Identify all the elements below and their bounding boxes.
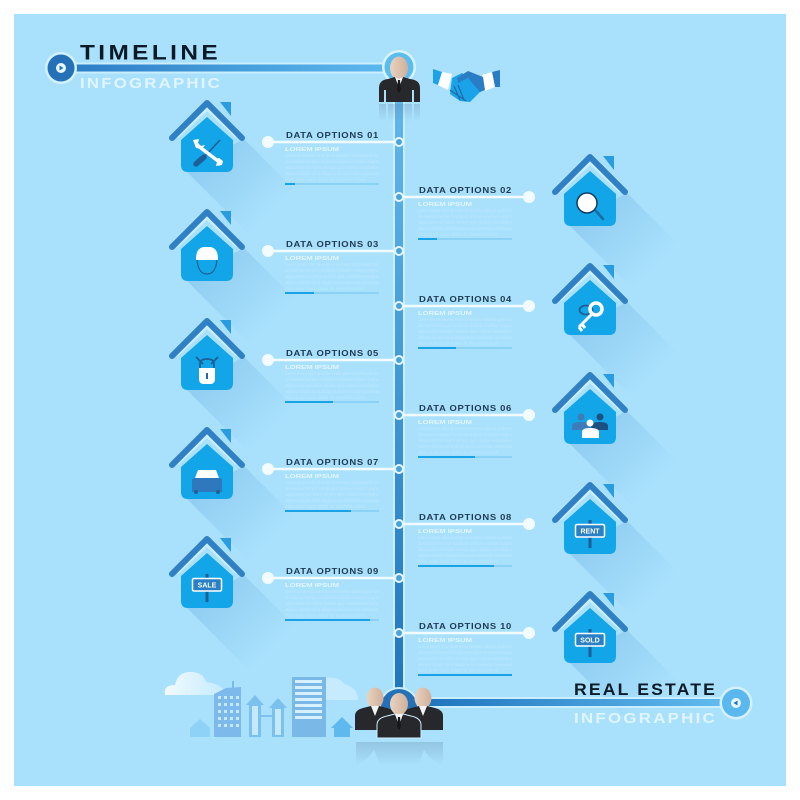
icon: house with tools <box>172 102 314 240</box>
body text 09: aliqua enim ad minim veniam quis nostrud exercitation <box>285 601 379 606</box>
body text 09: ullamco laboris nisi ut aliquip ex ea commodo consequat <box>285 607 380 612</box>
subtitle 04: LOREM IPSUM <box>418 311 472 317</box>
connector 01 <box>262 136 403 148</box>
body text 06: do eiusmod tempor incididunt ut labore et dolore magna <box>418 432 512 437</box>
body text 06: ullamco laboris nisi ut aliquip ex ea commodo consequat <box>418 444 513 449</box>
heading: infographic lower: INFOGRAPHIC <box>574 710 717 727</box>
body text 07: Lorem ipsum dolor sit amet consectetur adipiscing elit sed <box>285 480 379 485</box>
body text 04: duis aute irure dolor in reprehenderit <box>418 341 499 346</box>
icon: handshake <box>433 69 500 102</box>
vertical timeline bar <box>393 90 405 705</box>
row 2: data options 02 <box>395 156 697 294</box>
icon: businessman top <box>379 50 420 122</box>
connector 07 <box>262 463 403 475</box>
body text 03: do eiusmod tempor incididunt ut labore et dolore magna <box>285 268 379 273</box>
body text 02: duis aute irure dolor in reprehenderit <box>418 232 499 237</box>
body text 09 <box>285 589 380 618</box>
bottom end bar <box>425 686 752 720</box>
body text 01: duis aute irure dolor in reprehenderit <box>285 177 366 182</box>
icon: business team <box>355 688 443 766</box>
small house <box>331 717 353 737</box>
body text 07 <box>285 480 380 509</box>
top title bar <box>45 52 390 84</box>
subtitle 03: LOREM IPSUM <box>285 256 339 262</box>
title 07: DATA OPTIONS 07 <box>286 458 379 467</box>
icon: house with key <box>555 265 697 403</box>
body text 05: aliqua enim ad minim veniam quis nostrud exercitation <box>285 383 379 388</box>
body text 05 <box>285 371 380 400</box>
heading: real estate: REAL ESTATE <box>574 681 717 699</box>
body text 02: ullamco laboris nisi ut aliquip ex ea commodo consequat <box>418 226 513 231</box>
title 06: DATA OPTIONS 06 <box>419 404 512 413</box>
body text 06 <box>418 426 513 455</box>
title 01: DATA OPTIONS 01 <box>286 131 379 140</box>
progress 04 <box>418 347 512 349</box>
body text 04: ullamco laboris nisi ut aliquip ex ea commodo consequat <box>418 335 513 340</box>
body text 07: ullamco laboris nisi ut aliquip ex ea commodo consequat <box>285 498 380 503</box>
row 8: data options 08 <box>395 484 697 622</box>
body text 05: ullamco laboris nisi ut aliquip ex ea commodo consequat <box>285 389 380 394</box>
row 4: data options 04 <box>395 265 697 403</box>
icon: house with family <box>555 374 697 512</box>
subtitle 01: LOREM IPSUM <box>285 147 339 153</box>
connector 10 <box>395 627 535 639</box>
connector 06 <box>395 409 535 421</box>
body text 02: do eiusmod tempor incididunt ut labore et dolore magna <box>418 214 512 219</box>
body text 07: do eiusmod tempor incididunt ut labore et dolore magna <box>285 486 379 491</box>
body text 02: Lorem ipsum dolor sit amet consectetur adipiscing elit sed <box>418 208 512 213</box>
body text 04: aliqua enim ad minim veniam quis nostrud exercitation <box>418 329 512 334</box>
row 1: data options 01 <box>172 102 403 240</box>
icon: house with sale sign: SALE <box>198 582 217 590</box>
body text 01: aliqua enim ad minim veniam quis nostrud exercitation <box>285 165 379 170</box>
heading: timeline: TIMELINE <box>80 40 221 64</box>
subtitle 02: LOREM IPSUM <box>418 202 472 208</box>
row 3: data options 03 <box>172 211 403 349</box>
row 5: data options 05 <box>172 320 403 458</box>
progress 02 <box>418 238 512 240</box>
icon: house with padlock <box>172 320 314 458</box>
body text 05: do eiusmod tempor incididunt ut labore et dolore magna <box>285 377 379 382</box>
title 05: DATA OPTIONS 05 <box>286 349 379 358</box>
connector 03 <box>262 245 403 257</box>
body text 06: Lorem ipsum dolor sit amet consectetur adipiscing elit sed <box>418 426 512 431</box>
body text 04 <box>418 317 513 346</box>
body text 01: ullamco laboris nisi ut aliquip ex ea commodo consequat <box>285 171 380 176</box>
row 9: data options 09 <box>172 538 403 676</box>
body text 10: duis aute irure dolor in reprehenderit <box>418 668 499 673</box>
body text 09: duis aute irure dolor in reprehenderit <box>285 613 366 618</box>
subtitle 05: LOREM IPSUM <box>285 365 339 371</box>
body text 01: do eiusmod tempor incididunt ut labore et dolore magna <box>285 159 379 164</box>
subtitle 06: LOREM IPSUM <box>418 420 472 426</box>
body text 10: aliqua enim ad minim veniam quis nostrud exercitation <box>418 656 512 661</box>
title 02: DATA OPTIONS 02 <box>419 186 512 195</box>
progress 01 <box>285 183 379 185</box>
subtitle 10: LOREM IPSUM <box>418 638 472 644</box>
progress 05 <box>285 401 379 403</box>
connector 05 <box>262 354 403 366</box>
title 08: DATA OPTIONS 08 <box>419 513 512 522</box>
icon: house with rent sign <box>555 484 697 622</box>
progress 06 <box>418 456 512 458</box>
body text 05: duis aute irure dolor in reprehenderit <box>285 395 366 400</box>
subtitle 09: LOREM IPSUM <box>285 583 339 589</box>
body text 10 <box>418 644 513 673</box>
body text 10: ullamco laboris nisi ut aliquip ex ea commodo consequat <box>418 662 513 667</box>
office block <box>292 677 326 737</box>
connector 04 <box>395 300 535 312</box>
progress 09 <box>285 619 379 621</box>
progress 08 <box>418 565 512 567</box>
subtitle 07: LOREM IPSUM <box>285 474 339 480</box>
body text 04: Lorem ipsum dolor sit amet consectetur adipiscing elit sed <box>418 317 512 322</box>
apartment tower <box>214 681 241 737</box>
connector 02 <box>395 191 535 203</box>
title 03: DATA OPTIONS 03 <box>286 240 379 249</box>
row 10: data options 10 <box>395 593 697 731</box>
row 6: data options 06 <box>395 374 697 512</box>
icon: house with rent sign: RENT <box>580 528 600 536</box>
title 10: DATA OPTIONS 10 <box>419 622 512 631</box>
body text 10: Lorem ipsum dolor sit amet consectetur adipiscing elit sed <box>418 644 512 649</box>
body text 03: ullamco laboris nisi ut aliquip ex ea commodo consequat <box>285 280 380 285</box>
body text 05: Lorem ipsum dolor sit amet consectetur adipiscing elit sed <box>285 371 379 376</box>
body text 08 <box>418 535 513 564</box>
icon: house with sold sign <box>555 593 697 731</box>
body text 01 <box>285 153 380 182</box>
cloud left <box>165 672 226 695</box>
body text 09: Lorem ipsum dolor sit amet consectetur adipiscing elit sed <box>285 589 379 594</box>
body text 04: do eiusmod tempor incididunt ut labore et dolore magna <box>418 323 512 328</box>
progress 07 <box>285 510 379 512</box>
body text 06: aliqua enim ad minim veniam quis nostrud exercitation <box>418 438 512 443</box>
city skyline illustration <box>165 672 358 737</box>
row 7: data options 07 <box>172 429 403 567</box>
progress 03 <box>285 292 379 294</box>
icon: house with sale sign <box>172 538 314 676</box>
subtitle 08: LOREM IPSUM <box>418 529 472 535</box>
icon: house with car <box>172 429 314 567</box>
body text 09: do eiusmod tempor incididunt ut labore et dolore magna <box>285 595 379 600</box>
body text 08: duis aute irure dolor in reprehenderit <box>418 559 499 564</box>
body text 03 <box>285 262 380 291</box>
body text 01: Lorem ipsum dolor sit amet consectetur adipiscing elit sed <box>285 153 379 158</box>
icon: house with magnifier <box>555 156 697 294</box>
title 04: DATA OPTIONS 04 <box>419 295 512 304</box>
body text 06: duis aute irure dolor in reprehenderit <box>418 450 499 455</box>
heading: infographic: INFOGRAPHIC <box>80 75 222 92</box>
body text 02 <box>418 208 513 237</box>
body text 03: duis aute irure dolor in reprehenderit <box>285 286 366 291</box>
connector 09 <box>262 572 403 584</box>
body text 03: aliqua enim ad minim veniam quis nostrud exercitation <box>285 274 379 279</box>
body text 08: aliqua enim ad minim veniam quis nostrud exercitation <box>418 547 512 552</box>
body text 02: aliqua enim ad minim veniam quis nostrud exercitation <box>418 220 512 225</box>
connector 08 <box>395 518 535 530</box>
body text 07: duis aute irure dolor in reprehenderit <box>285 504 366 509</box>
icon: house with sold sign: SOLD <box>580 638 600 644</box>
body text 03: Lorem ipsum dolor sit amet consectetur adipiscing elit sed <box>285 262 379 267</box>
body text 08: Lorem ipsum dolor sit amet consectetur adipiscing elit sed <box>418 535 512 540</box>
progress 10 <box>418 674 512 676</box>
body text 08: ullamco laboris nisi ut aliquip ex ea commodo consequat <box>418 553 513 558</box>
faint house <box>190 719 210 737</box>
body text 08: do eiusmod tempor incididunt ut labore et dolore magna <box>418 541 512 546</box>
body text 07: aliqua enim ad minim veniam quis nostrud exercitation <box>285 492 379 497</box>
body text 10: do eiusmod tempor incididunt ut labore et dolore magna <box>418 650 512 655</box>
twin towers <box>246 695 287 737</box>
icon: house with helmet <box>172 211 314 349</box>
cloud right <box>322 678 358 700</box>
title 09: DATA OPTIONS 09 <box>286 567 379 576</box>
